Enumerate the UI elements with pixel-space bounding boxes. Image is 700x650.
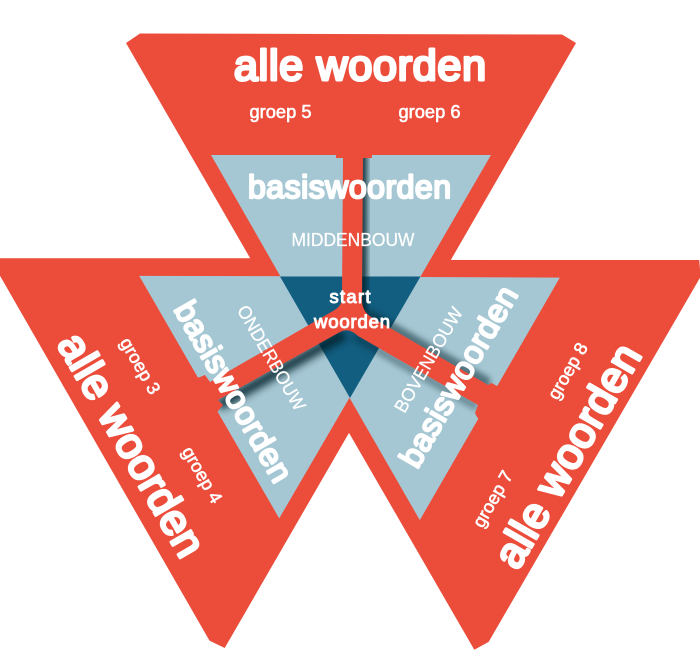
label: groep 4: groep 4	[178, 443, 226, 507]
label: groep 5: groep 5	[250, 102, 312, 122]
label: woorden: woorden	[313, 311, 390, 332]
label: groep 6: groep 6	[398, 102, 460, 122]
arm shadows	[214, 150, 490, 411]
label: MIDDENBOUW: MIDDENBOUW	[292, 229, 415, 250]
inner triangle: onderbouw	[139, 154, 490, 518]
heading: basiswoorden top: basiswoorden	[248, 169, 451, 205]
label: start: start	[330, 286, 370, 307]
outer triangle: middenbouw	[126, 34, 576, 433]
heading: alle woorden right: alle woorden	[485, 336, 651, 576]
inner triangle: bovenbouw	[209, 156, 560, 520]
heading: basiswoorden left: basiswoorden	[167, 295, 300, 488]
heading: basiswoorden right: basiswoorden	[392, 280, 525, 473]
panel: light blue basiswoorden triangles	[139, 154, 560, 520]
outer triangle: onderbouw	[0, 63, 562, 650]
outer triangle: bovenbouw	[137, 65, 700, 650]
label: groep 3: groep 3	[116, 334, 164, 398]
label: ONDERBOUW: ONDERBOUW	[233, 301, 310, 415]
label: groep 7: groep 7	[469, 467, 517, 531]
centre triangle: startwoorden	[280, 276, 420, 398]
label: BOVENBOUW: BOVENBOUW	[390, 303, 467, 416]
heading: alle woorden top: alle woorden	[234, 42, 486, 90]
red Y divider	[190, 150, 510, 425]
label: groep 8: groep 8	[544, 339, 592, 403]
inner triangle: middenbouw	[211, 155, 491, 398]
heading: alle woorden left: alle woorden	[48, 325, 214, 565]
